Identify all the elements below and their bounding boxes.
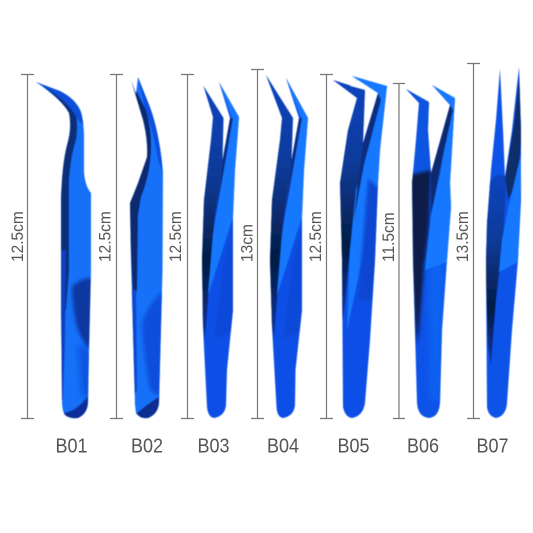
model label B04: B04 <box>267 434 299 458</box>
tweezer B04 <box>266 75 308 418</box>
tweezer B03 <box>200 82 239 418</box>
length label B01: 12.5cm <box>8 211 27 262</box>
ruler 4 <box>251 70 264 418</box>
length label B04: 13cm <box>238 224 257 262</box>
tweezer B02 <box>129 77 165 420</box>
infographic: tweezer size chart <box>12 62 522 452</box>
tweezer B06 <box>406 85 455 418</box>
model label B06: B06 <box>407 434 439 458</box>
model label B07: B07 <box>476 434 509 458</box>
model label B02: B02 <box>131 434 163 458</box>
model label B05: B05 <box>338 434 370 458</box>
ruler 7 <box>467 64 480 418</box>
model label B03: B03 <box>198 434 230 458</box>
tweezer B07 <box>485 67 522 418</box>
ruler 6 <box>393 84 405 418</box>
length label B07: 13.5cm <box>453 211 472 262</box>
model label B01: B01 <box>56 434 88 458</box>
length label B02: 12.5cm <box>96 211 115 262</box>
ruler 2 <box>110 74 123 418</box>
length label B03: 12.5cm <box>166 211 185 262</box>
ruler 1 <box>21 74 34 418</box>
length label B05: 12.5cm <box>306 211 325 262</box>
ruler 3 <box>181 74 194 418</box>
tweezer B01 <box>36 82 92 420</box>
length label B06: 11.5cm <box>379 212 398 262</box>
ruler 5 <box>320 74 333 418</box>
tweezer B05 <box>333 76 387 418</box>
